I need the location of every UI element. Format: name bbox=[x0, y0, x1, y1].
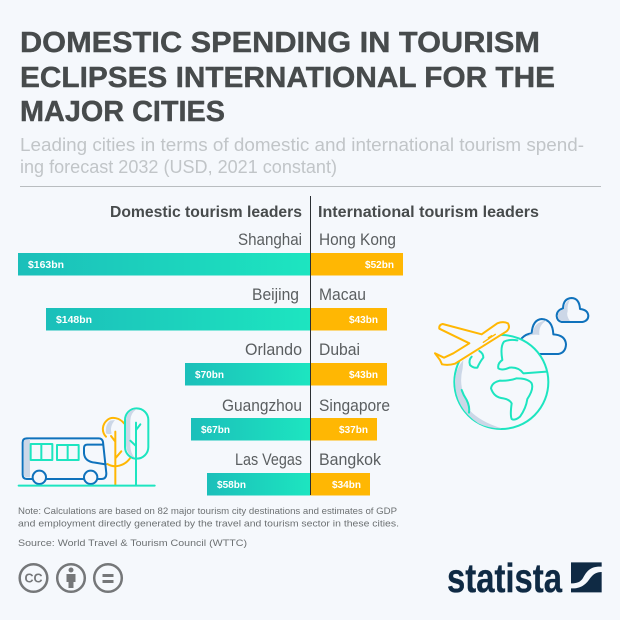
bar: Shanghai bbox=[18, 231, 310, 276]
title: MAJOR CITIES bbox=[20, 96, 225, 128]
bus windows bbox=[31, 444, 79, 460]
cloud: large bbox=[522, 319, 566, 354]
note: Note: Calculations are based on 82 major tourism city destinations and estimates of GDP bbox=[18, 506, 397, 517]
bar: Beijing: Beijing bbox=[252, 286, 299, 304]
bar: Macau: $43bn bbox=[349, 315, 378, 326]
bar: Orlando: $70bn bbox=[195, 370, 224, 381]
title: DOMESTIC SPENDING IN TOURISM bbox=[20, 27, 540, 59]
bar: Las Vegas: $58bn bbox=[217, 480, 246, 491]
bar: Las Vegas: Las Vegas bbox=[235, 451, 302, 469]
subtitle bbox=[20, 134, 584, 177]
bar: Singapore bbox=[310, 397, 390, 440]
ground line bbox=[19, 483, 155, 489]
bar: Singapore: Singapore bbox=[319, 397, 390, 415]
bar: Guangzhou bbox=[191, 397, 310, 440]
bar: Orlando: Orlando bbox=[245, 341, 302, 359]
subtitle: Leading cities in terms of domestic and international tourism spend- bbox=[20, 134, 584, 155]
wordmark: statista bbox=[447, 555, 563, 601]
globe bbox=[454, 335, 548, 429]
airplane bbox=[435, 322, 509, 365]
bar: Singapore: $37bn bbox=[339, 425, 368, 436]
note bbox=[18, 506, 399, 530]
bar: Bangkok: Bangkok bbox=[319, 451, 382, 469]
bar: Dubai: Dubai bbox=[319, 341, 360, 359]
logo mark bbox=[571, 562, 602, 592]
tree: yellow bbox=[103, 418, 130, 485]
icon: attribution person bbox=[57, 564, 85, 592]
bar: Shanghai: $163bn bbox=[28, 260, 64, 271]
bar: Hong Kong bbox=[310, 231, 403, 276]
bar: Guangzhou: $67bn bbox=[201, 425, 230, 436]
bar: Dubai bbox=[310, 341, 387, 386]
international bar chart bbox=[310, 231, 403, 496]
statista logo bbox=[447, 555, 602, 601]
icon: globe, plane and clouds bbox=[435, 298, 588, 429]
license icons bbox=[20, 564, 122, 592]
bar: Orlando bbox=[185, 341, 310, 386]
tree: teal bbox=[125, 408, 148, 485]
bar: Bangkok bbox=[310, 451, 382, 496]
bar: Guangzhou: Guangzhou bbox=[222, 397, 302, 415]
note: and employment directly generated by the travel and tourism sector in these cities. bbox=[18, 518, 399, 530]
column heading: international: International tourism leaders bbox=[318, 204, 539, 221]
bus body bbox=[23, 438, 106, 484]
cloud: small bbox=[557, 298, 588, 322]
bar: Hong Kong: $52bn bbox=[365, 260, 394, 271]
bar: Bangkok: $34bn bbox=[332, 480, 361, 491]
subtitle: ing forecast 2032 (USD, 2021 constant) bbox=[20, 156, 337, 177]
bar: Beijing: $148bn bbox=[56, 315, 92, 326]
icon: bus and trees bbox=[19, 408, 155, 486]
column heading: domestic: Domestic tourism leaders bbox=[110, 204, 302, 221]
bar: Macau bbox=[310, 286, 387, 330]
bar: Macau: Macau bbox=[319, 286, 366, 304]
bar: Beijing bbox=[46, 286, 310, 330]
bar: Las Vegas bbox=[207, 451, 310, 496]
domestic bar chart bbox=[18, 231, 310, 496]
source: Source: World Travel & Tourism Council (WTTC) bbox=[18, 538, 247, 549]
title: ECLIPSES INTERNATIONAL FOR THE bbox=[20, 62, 555, 94]
title bbox=[20, 27, 555, 128]
bar: Hong Kong: Hong Kong bbox=[319, 231, 396, 249]
icon: no derivatives bbox=[94, 564, 122, 592]
icon: cc: CC bbox=[24, 572, 43, 586]
bar: Shanghai: Shanghai bbox=[238, 231, 302, 249]
bar: Dubai: $43bn bbox=[349, 370, 378, 381]
